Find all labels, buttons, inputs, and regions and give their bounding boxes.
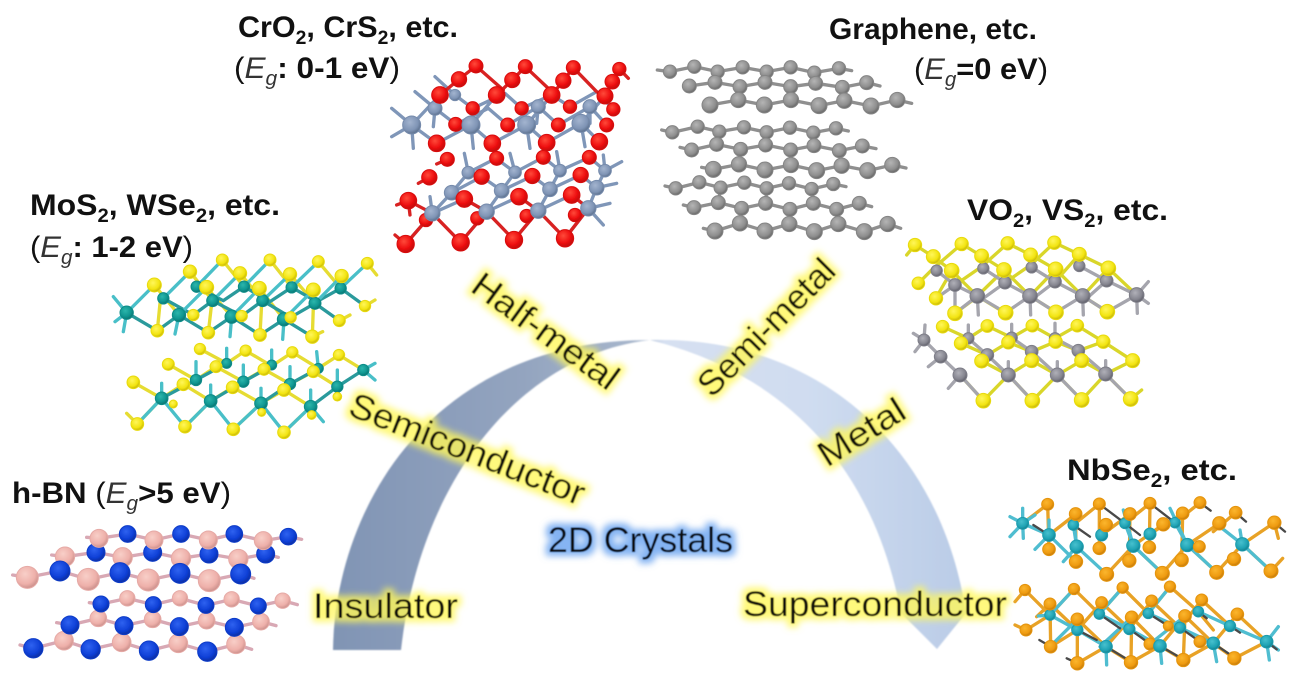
heading: CrO2 group: ) [389, 52, 400, 85]
heading: graphene group: g [945, 69, 956, 91]
heading: h-BN group: ) [221, 477, 231, 510]
heading: VO2 group: VO [967, 194, 1010, 227]
heading: CrO2 group: , CrS [306, 11, 378, 44]
heading: MoS2 group: : 1-2 eV [72, 231, 183, 264]
label: Semiconductor: Semiconductor [344, 386, 591, 513]
crystal: NbSe2 bilayer [1010, 497, 1285, 670]
label: Semi-metal: Semi-metal [690, 251, 843, 404]
heading: graphene group: (E [914, 53, 944, 86]
heading: CrO2 group [234, 11, 458, 90]
heading: graphene group [829, 13, 1048, 91]
heading: MoS2 group: 2 [196, 206, 207, 227]
crystal: CrO2 bilayer [392, 59, 628, 253]
heading: graphene group: ) [1038, 53, 1048, 86]
heading: MoS2 group: 2 [98, 206, 109, 227]
heading: MoS2 group [30, 189, 280, 269]
heading: VO2 group: 2 [1084, 211, 1096, 232]
label: Insulator: Insulator [313, 587, 458, 626]
crystal: VS2 bilayer [907, 236, 1148, 408]
heading: CrO2 group: CrO [238, 11, 295, 44]
heading: h-BN group: h-BN (E [12, 477, 126, 510]
heading: CrO2 group: : 0-1 eV [277, 52, 389, 85]
label: Half-metal: Half-metal [464, 265, 626, 398]
crystal: h-BN bilayer [13, 526, 302, 661]
heading: h-BN group: >5 eV [138, 477, 221, 510]
heading: CrO2 group: g [266, 68, 277, 90]
heading: VO2 group: , etc. [1096, 194, 1168, 227]
heading: VO2 group: , VS [1024, 194, 1084, 227]
crystal: MoS2 bilayer [113, 254, 377, 439]
heading: graphene group: Graphene, etc. [829, 13, 1037, 46]
heading: NbSe2 group: 2 [1151, 471, 1162, 492]
heading: graphene group: =0 eV [956, 53, 1038, 86]
label: Metal: Metal [811, 391, 913, 475]
heading: CrO2 group: , etc. [388, 11, 458, 44]
heading: CrO2 group: (E [234, 52, 265, 85]
heading: h-BN group: g [127, 493, 138, 515]
label: 2D Crystals: 2D Crystals [548, 521, 733, 560]
heading: VO2 group: 2 [1013, 211, 1024, 232]
heading: CrO2 group: 2 [378, 28, 388, 49]
heading: NbSe2 group: , etc. [1162, 454, 1237, 487]
heading: MoS2 group: (E [30, 231, 60, 264]
heading: MoS2 group: g [61, 247, 72, 269]
heading: MoS2 group: , etc. [207, 189, 280, 222]
label: Superconductor: Superconductor [743, 585, 1007, 624]
heading: MoS2 group: , WSe [109, 189, 196, 222]
crystal: graphene trilayer [657, 60, 912, 240]
heading: NbSe2 group: NbSe [1067, 454, 1144, 487]
heading: MoS2 group: MoS [30, 189, 93, 222]
heading: CrO2 group: 2 [296, 28, 306, 49]
curved arrow: insulator to superconductor arc [333, 340, 966, 650]
heading: MoS2 group: ) [183, 231, 193, 264]
